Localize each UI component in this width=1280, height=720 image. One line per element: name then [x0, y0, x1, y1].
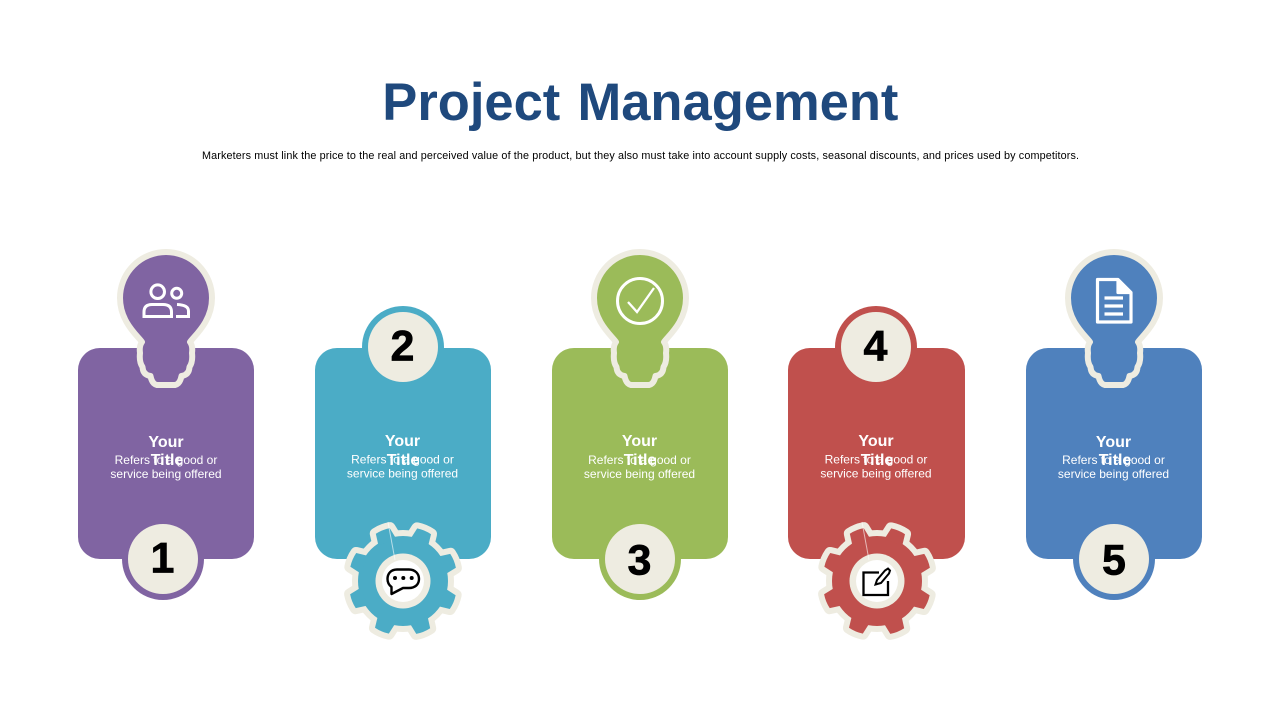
number badge 3 [605, 524, 675, 594]
card text 4: Your [858, 433, 894, 450]
lightbulb 3 [594, 252, 686, 385]
panel: step 5 [1026, 252, 1202, 600]
icon: chat bubble [388, 570, 419, 594]
card text 2 [347, 433, 458, 480]
number ring 5 [1073, 518, 1155, 600]
panel: step 2 [315, 306, 491, 635]
card text 1: Refers to a good or [115, 453, 217, 467]
icon: people [144, 285, 188, 316]
card text 3: service being offered [584, 467, 695, 481]
card text 4: service being offered [820, 466, 932, 480]
icon: check mark [618, 278, 662, 324]
card text 3: Refers to a good or [588, 453, 691, 467]
number ring 1 [122, 518, 204, 600]
card text 5: Title [1099, 452, 1131, 469]
number badge 4 [841, 312, 911, 382]
number badge 5 [1079, 524, 1149, 594]
card text 3: Title [624, 452, 656, 469]
card text 4 [820, 433, 932, 480]
card text 1 [110, 434, 222, 481]
number badge 2 [368, 312, 438, 382]
number badge 1: 1 [151, 534, 174, 582]
card text 5: Your [1096, 434, 1131, 451]
gear 2 [349, 522, 457, 635]
card 3 [552, 348, 728, 559]
card text 2: Refers to a good or [351, 452, 454, 466]
lightbulb 1 [120, 252, 212, 385]
card text 3: Your [622, 433, 657, 450]
number badge 4: 4 [864, 322, 888, 370]
lightbulb 5 [1068, 252, 1160, 385]
icon: edit note [864, 568, 890, 595]
card 2 [315, 348, 491, 559]
card text 1: Your [148, 434, 184, 451]
number ring 3 [599, 518, 681, 600]
icon: document [1098, 280, 1131, 322]
card text 3 [584, 433, 695, 481]
card text 5: Refers to a good or [1062, 453, 1165, 467]
gear 4 [823, 522, 931, 635]
card text 2: service being offered [347, 466, 458, 480]
number badge 5: 5 [1102, 536, 1126, 584]
subtitle text: Marketers must link the price to the real and perceived value of the product, but they also must take into account supply costs, seasonal discounts, and prices used by competitors. [202, 150, 1079, 162]
number ring 2 [362, 306, 444, 388]
card text 1: service being offered [110, 467, 222, 481]
title: Project [382, 73, 560, 132]
title: Management [578, 73, 898, 132]
card text 2: Your [385, 433, 420, 450]
card text 4: Title [861, 452, 893, 469]
panel: step 1 [78, 252, 254, 600]
card 5 [1026, 348, 1202, 559]
card 1 [78, 348, 254, 559]
panel: step 3 [552, 252, 728, 600]
card text 2: Title [387, 452, 419, 469]
number badge 3: 3 [628, 536, 651, 584]
card text 5 [1058, 434, 1169, 481]
card text 4: Refers to a good or [825, 452, 927, 466]
number badge 1 [128, 524, 198, 594]
number badge 2: 2 [391, 322, 414, 370]
card text 1: Title [151, 452, 183, 469]
card text 5: service being offered [1058, 467, 1169, 481]
number ring 4 [835, 306, 917, 388]
card 4 [788, 348, 965, 559]
panel: step 4 [788, 306, 965, 635]
